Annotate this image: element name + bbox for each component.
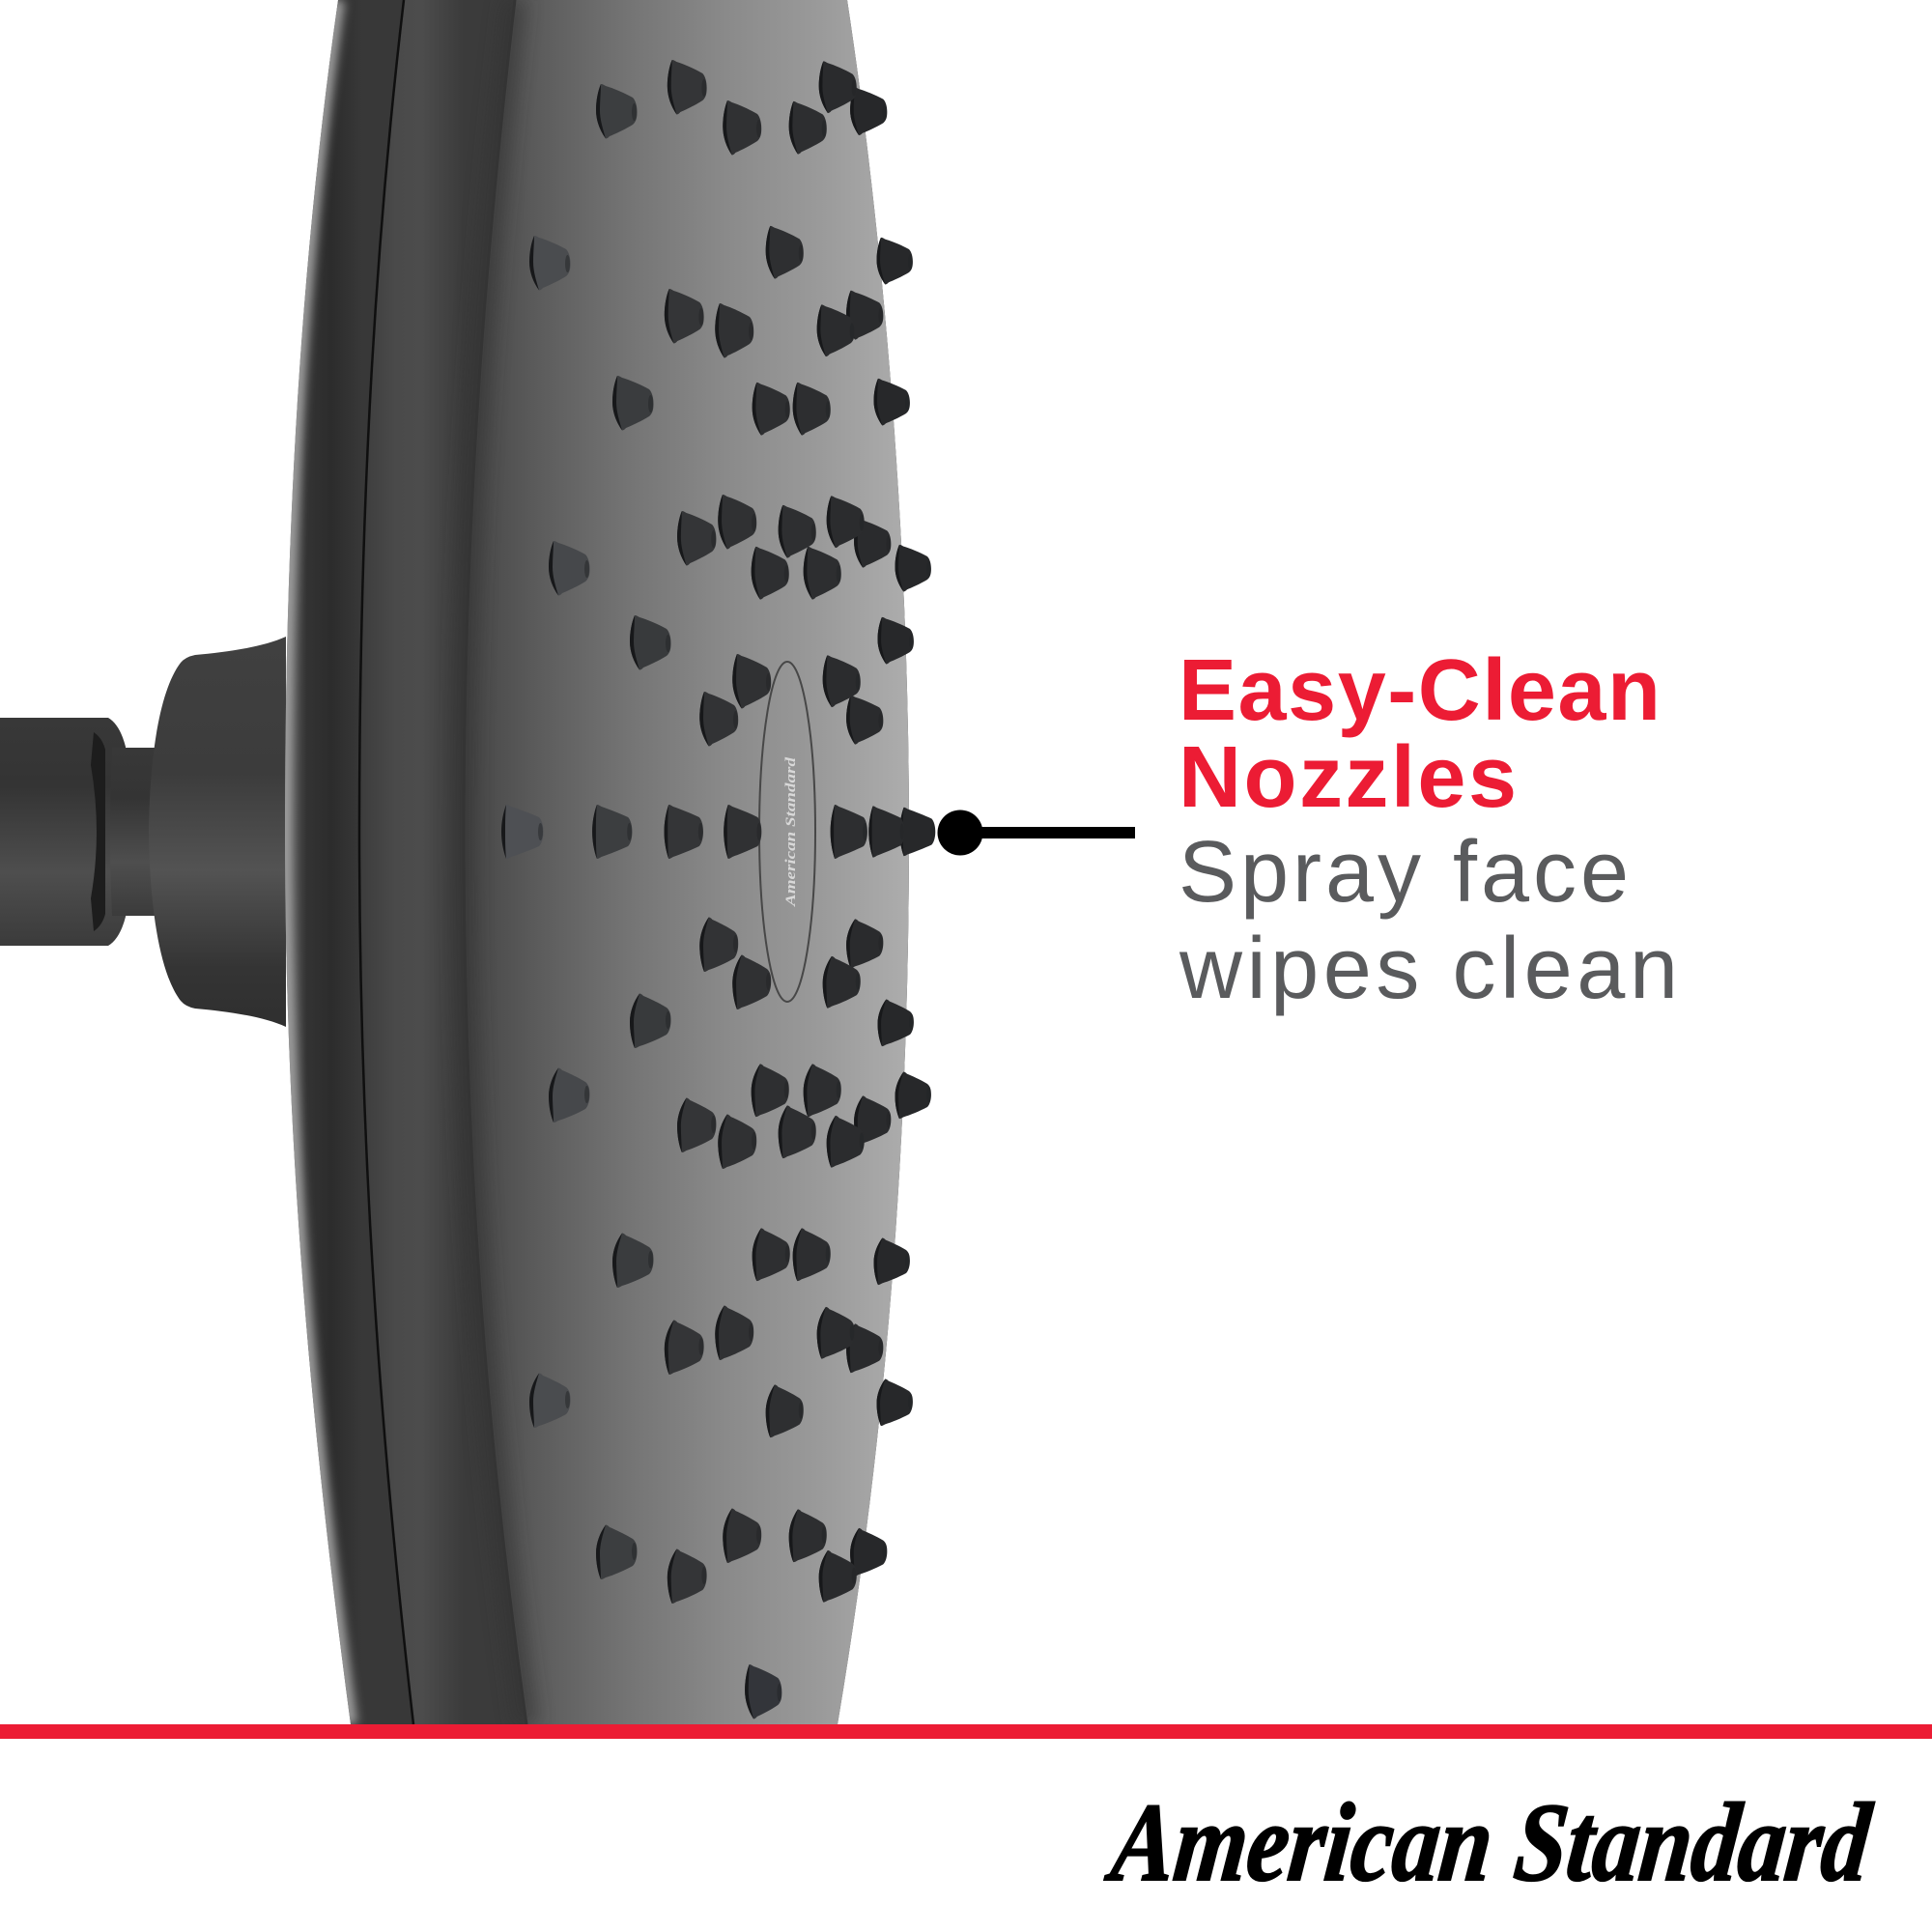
nozzles: centre row bbox=[501, 805, 935, 859]
neck bbox=[110, 748, 155, 916]
pipe end ring bbox=[91, 732, 105, 931]
callout pointer bbox=[937, 810, 1135, 856]
plate ring bbox=[759, 662, 815, 1002]
band shading bbox=[464, 0, 526, 1724]
head body: outer rim bbox=[270, 0, 947, 1724]
pointer line bbox=[960, 827, 1135, 838]
inner seam bbox=[464, 0, 526, 1724]
logo plate on spray face bbox=[759, 662, 815, 1002]
pointer dot bbox=[937, 810, 983, 856]
middle band bbox=[371, 0, 451, 1724]
callout text bbox=[1179, 642, 1678, 1017]
rim highlight bbox=[285, 0, 351, 1724]
outer seam bbox=[359, 0, 413, 1724]
nozzles: bottom half bbox=[529, 0, 931, 1604]
heading bbox=[1179, 642, 1661, 826]
description: Spray face bbox=[1179, 824, 1629, 921]
heading: Nozzles bbox=[1179, 729, 1517, 826]
arm pipe bbox=[0, 718, 126, 946]
description bbox=[1179, 824, 1678, 1017]
description: wipes clean bbox=[1179, 921, 1678, 1017]
heading: Easy-Clean bbox=[1179, 642, 1661, 739]
shower arm and connector bbox=[0, 637, 286, 1027]
shower head bbox=[285, 0, 909, 1724]
nozzles: top half bbox=[529, 60, 931, 1719]
bell flange bbox=[149, 637, 286, 1027]
red rule bbox=[0, 1724, 1932, 1739]
spray face bbox=[468, 0, 909, 1724]
engraved logo: American Standard bbox=[783, 756, 799, 907]
